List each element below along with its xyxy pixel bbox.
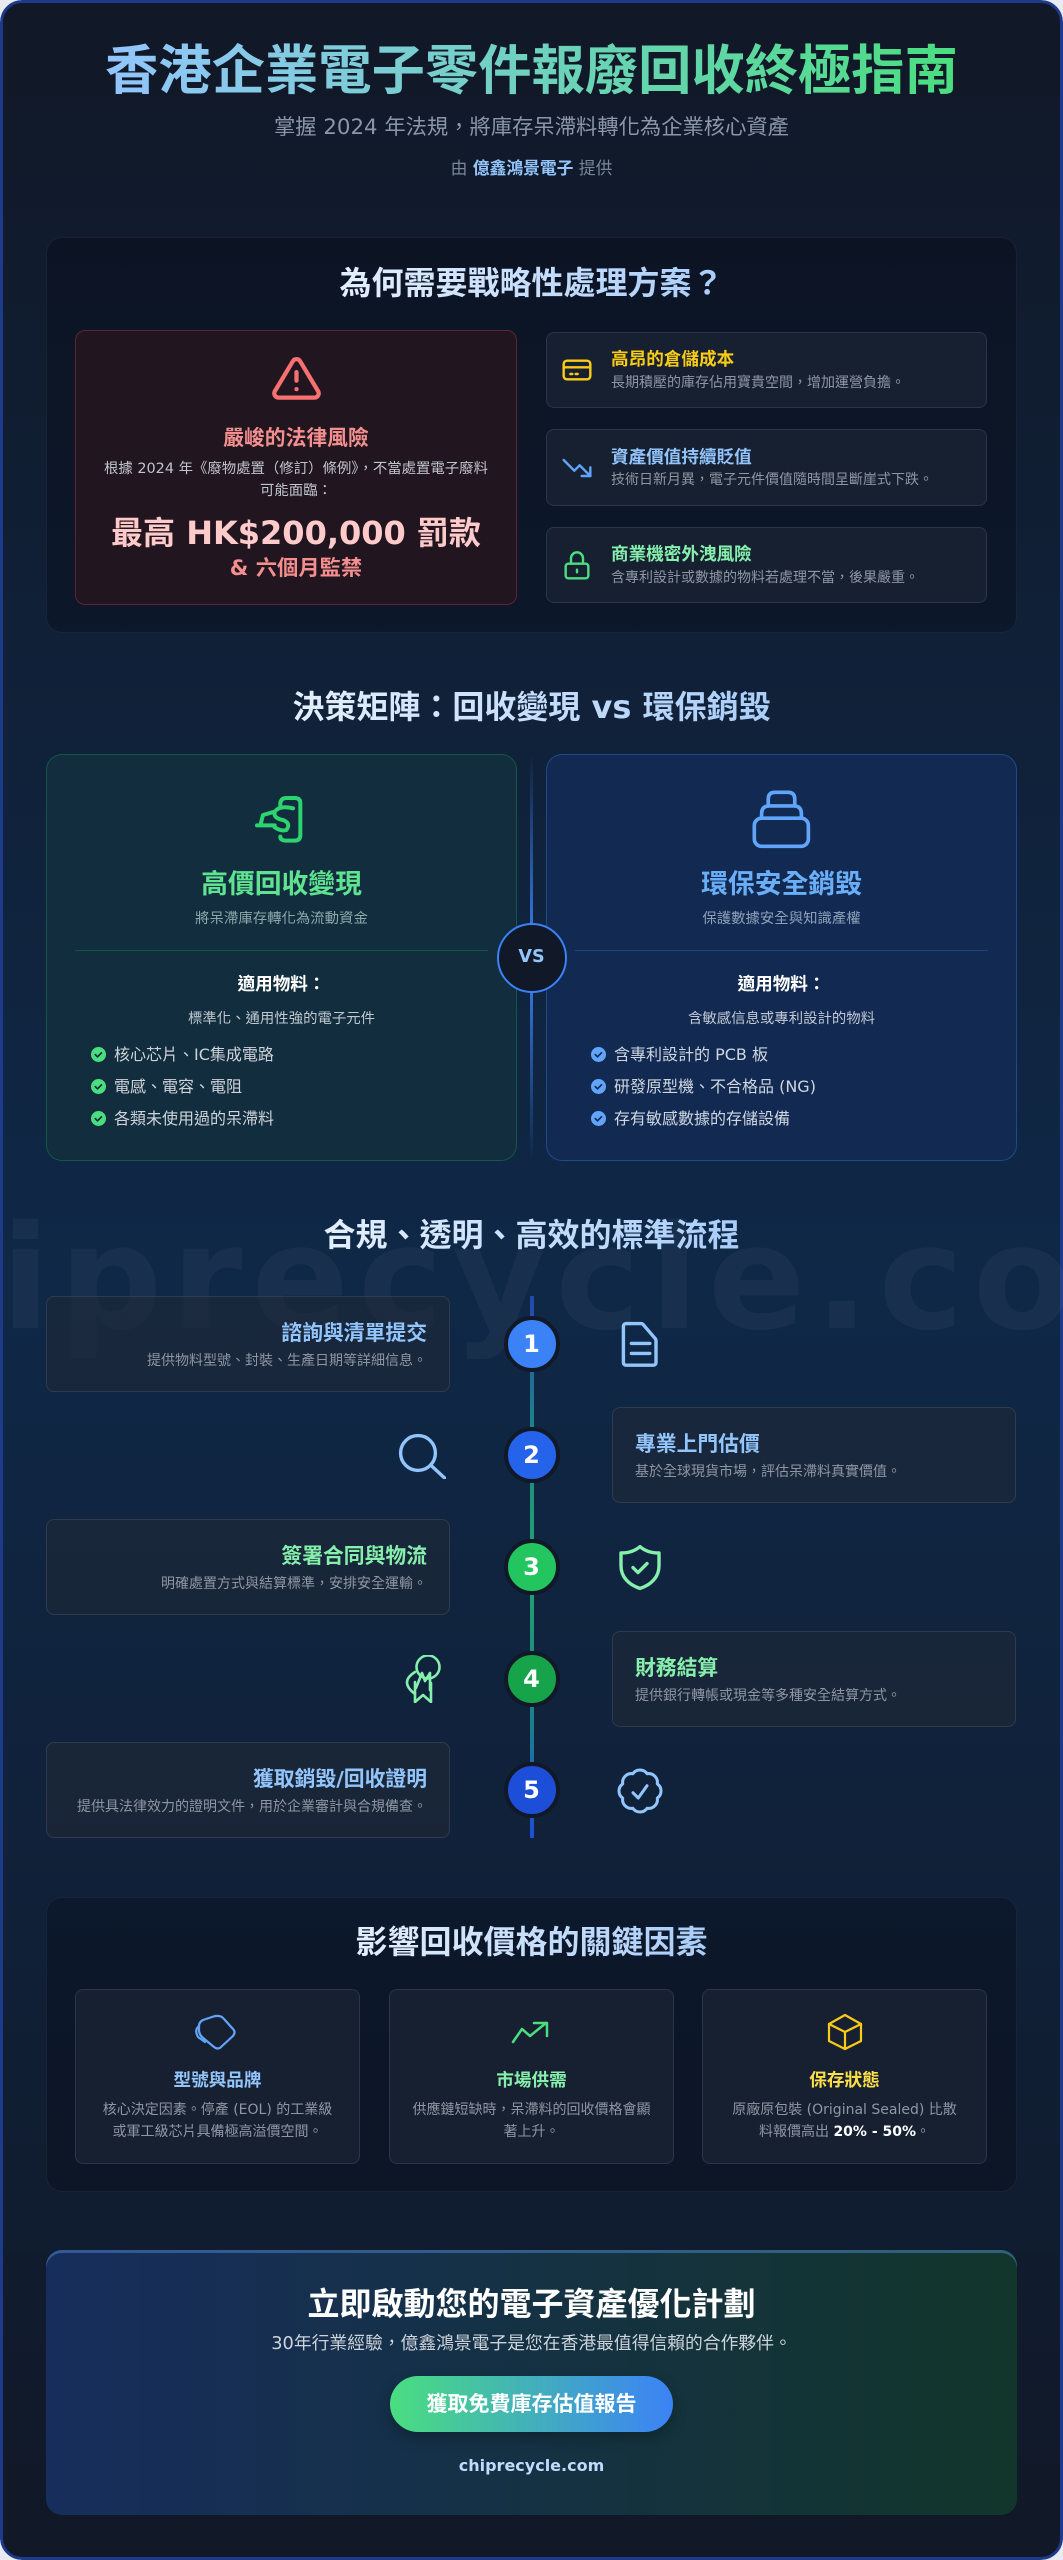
step 3 number: 3 [523,1553,540,1581]
panel: secure destruction [546,754,1017,1161]
fine amount: 最高 HK$200,000 罰款 [111,514,481,552]
step 5 card [46,1742,450,1838]
list item: 各類未使用過的呆滯料 [114,1109,274,1128]
secrets text: 含專利設計或數據的物料若處理不當，後果嚴重。 [611,570,919,586]
list item: 研發原型機、不合格品 (NG) [614,1077,816,1096]
card: depreciation [546,429,987,506]
step 2 title: 專業上門估價 [635,1432,760,1456]
icon: stacked archive [752,790,810,848]
subtitle: 保護數據安全與知識產權 [702,911,861,927]
VS badge: VS [518,947,545,967]
step 4 card [612,1631,1016,1727]
step 3 title: 簽署合同與物流 [281,1544,427,1568]
model text: 或軍工級芯片具備極高溢價空間。 [112,2124,322,2140]
title: 高價回收變現 [201,869,362,900]
icon: search [398,1434,446,1479]
step 4 number: 4 [523,1665,540,1693]
step 2 card [612,1407,1016,1503]
storage cost text: 長期積壓的庫存佔用寶貴空間，增加運營負擔。 [611,375,905,391]
icon: check badge [618,1768,662,1814]
step 4 title: 財務結算 [635,1656,718,1680]
panel: why strategic handling [46,237,1017,633]
market text: 著上升。 [504,2124,560,2140]
divider [575,950,988,951]
step 1 text: 提供物料型號、封裝、生產日期等詳細信息。 [147,1353,427,1369]
list item: 電感、電容、電阻 [114,1077,242,1096]
icon: credit card [562,360,592,380]
step 3 text: 明確處置方式與結算標準，安排安全運輸。 [161,1576,427,1592]
step 4 number [504,1651,560,1707]
subtitle: 掌握 2024 年法規，將庫存呆滯料轉化為企業核心資產 [274,115,789,140]
step 2 text: 基於全球現貨市場，評估呆滯料真實價值。 [635,1464,901,1480]
model text [103,2102,332,2140]
card: market demand [389,1989,674,2164]
card: secrets [546,527,987,603]
list item: 存有敏感數據的存儲設備 [614,1109,790,1128]
panel: legal risk [75,330,517,605]
vertical divider line [530,754,533,1161]
step 5 number: 5 [523,1776,540,1804]
icon: tag [195,2014,236,2050]
list item: 核心芯片、IC集成電路 [114,1045,274,1064]
step 2 number: 2 [523,1441,540,1469]
materials list [91,1045,274,1128]
subtitle: 將呆滯庫存轉化為流動資金 [195,911,368,927]
step 1 number: 1 [523,1330,540,1358]
state text: 原廠原包裝 (Original Sealed) 比散 [732,2102,957,2118]
legal risk text [104,460,488,499]
CTA text: 30年行業經驗，億鑫鴻景電子是您在香港最值得信賴的合作夥伴。 [271,2333,792,2354]
step 2 number [504,1427,560,1483]
depreciation text: 技術日新月異，電子元件價值隨時間呈斷崖式下跌。 [611,472,933,488]
secrets title: 商業機密外洩風險 [611,545,752,565]
heading: process: 合規、透明、高效的標準流程 [323,1216,740,1254]
step 1 number [504,1316,560,1372]
step 5 title: 獲取銷毀/回收證明 [253,1767,427,1791]
market text: 供應鏈短缺時，呆滯料的回收價格會顯 [412,2102,650,2118]
materials heading: 適用物料： [738,975,825,995]
state title: 保存狀態 [809,2071,880,2091]
card: storage cost [546,332,987,408]
panel: call to action [46,2250,1017,2515]
icon: medal [406,1655,441,1703]
timeline line [530,1296,534,1838]
step 4 text: 提供銀行轉帳或現金等多種安全結算方式。 [635,1688,901,1704]
icon: lock [564,551,590,580]
materials heading: 適用物料： [238,975,325,995]
imprisonment: & 六個月監禁 [230,556,362,581]
model title: 型號與品牌 [174,2071,261,2091]
CTA heading: 立即啟動您的電子資產優化計劃 [307,2285,756,2323]
CTA button [390,2376,673,2432]
list item: 含專利設計的 PCB 板 [614,1045,768,1064]
title: 香港企業電子零件報廢回收終極指南 [105,40,958,102]
model text: 核心決定因素。停產 (EOL) 的工業級 [103,2102,332,2118]
heading: price factors: 影響回收價格的關鍵因素 [355,1923,708,1961]
heading: decision matrix: 決策矩陣：回收變現 vs 環保銷毀 [292,688,771,726]
card: model and brand [75,1989,360,2164]
panel: price factors [46,1897,1017,2192]
icon: trending up [512,2022,548,2044]
icon: cube [828,2014,862,2050]
icon: document [622,1322,658,1367]
legal risk heading: 嚴峻的法律風險 [223,426,369,450]
card: storage state [702,1989,987,2164]
storage cost title: 高昂的倉儲成本 [611,350,734,370]
website: chiprecycle.com [459,2456,604,2475]
state text [732,2102,957,2140]
step 5 text: 提供具法律效力的證明文件，用於企業審計與合規備查。 [77,1799,427,1815]
icon: recycle cash [255,796,302,843]
materials list [591,1045,816,1128]
step 5 number [504,1762,560,1818]
materials text: 含敏感信息或專利設計的物料 [688,1011,875,1027]
market text [412,2102,650,2140]
icon: warning triangle [272,357,321,400]
market title: 市場供需 [496,2071,567,2091]
icon: trending down [562,458,592,478]
legal risk text: 根據 2024 年《廢物處置（修訂）條例》，不當處置電子廢料 [104,461,488,477]
icon: shield check [619,1544,661,1590]
VS badge [496,923,566,993]
heading: why strategic handling: 為何需要戰略性處理方案？ [339,264,724,302]
legal risk text: 可能面臨： [260,483,332,499]
step 1 card [46,1296,450,1392]
step 1 title: 諮詢與清單提交 [281,1321,427,1345]
title: 環保安全銷毀 [701,869,862,900]
depreciation title: 資產價值持續貶值 [611,448,752,468]
step 3 card [46,1519,450,1615]
panel: high value recycling [46,754,517,1161]
divider [75,950,488,951]
state text: 料報價高出 20% - 50%。 [759,2124,930,2140]
byline: 由 億鑫鴻景電子 提供 [451,158,612,178]
step 3 number [504,1539,560,1595]
materials text: 標準化、通用性強的電子元件 [188,1011,375,1027]
CTA button: 獲取免費庫存估值報告 [426,2392,636,2416]
